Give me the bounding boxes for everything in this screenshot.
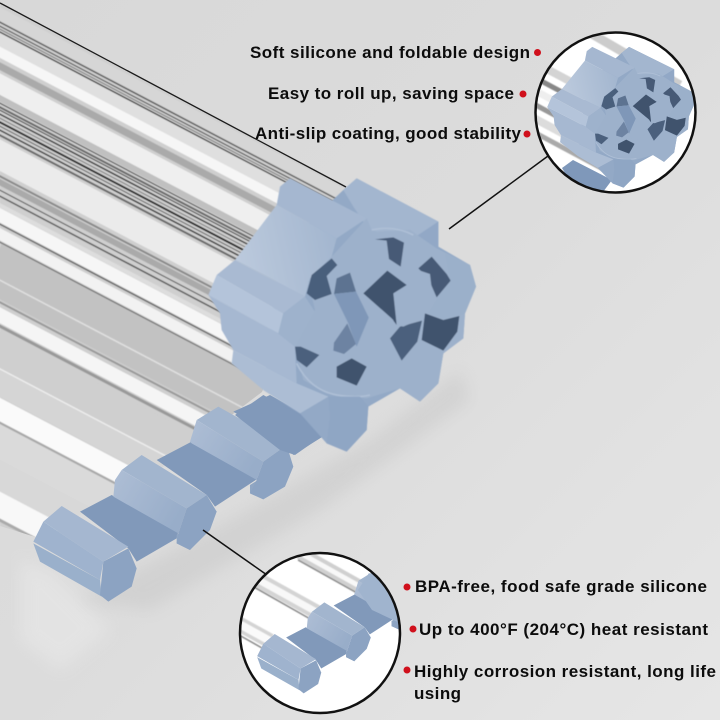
feature list: bottom: Highly corrosion resistant, long life xyxy=(414,662,716,681)
sheen and shadow on surface xyxy=(20,370,470,670)
rod top edge line xyxy=(0,3,346,187)
feature list: top: Easy to roll up, saving space xyxy=(268,84,514,103)
feature list: bottom: BPA-free, food safe grade silicone xyxy=(415,577,707,596)
callout line: bottom xyxy=(203,530,267,575)
feature list: top xyxy=(250,43,541,143)
feature list: top: Soft silicone and foldable design xyxy=(250,43,530,62)
silicone strip xyxy=(33,395,333,602)
inset: rolled end xyxy=(530,30,696,192)
inset: strip detail xyxy=(238,552,402,714)
feature list: bottom xyxy=(404,577,716,703)
callout line: top xyxy=(449,156,548,229)
chrome rods xyxy=(0,4,346,537)
feature list: bottom: using xyxy=(414,684,461,703)
rolled silicone end xyxy=(208,178,476,455)
feature list: bottom: Up to 400°F (204°C) heat resistant xyxy=(419,620,708,639)
feature list: top: Anti-slip coating, good stability xyxy=(255,124,522,143)
